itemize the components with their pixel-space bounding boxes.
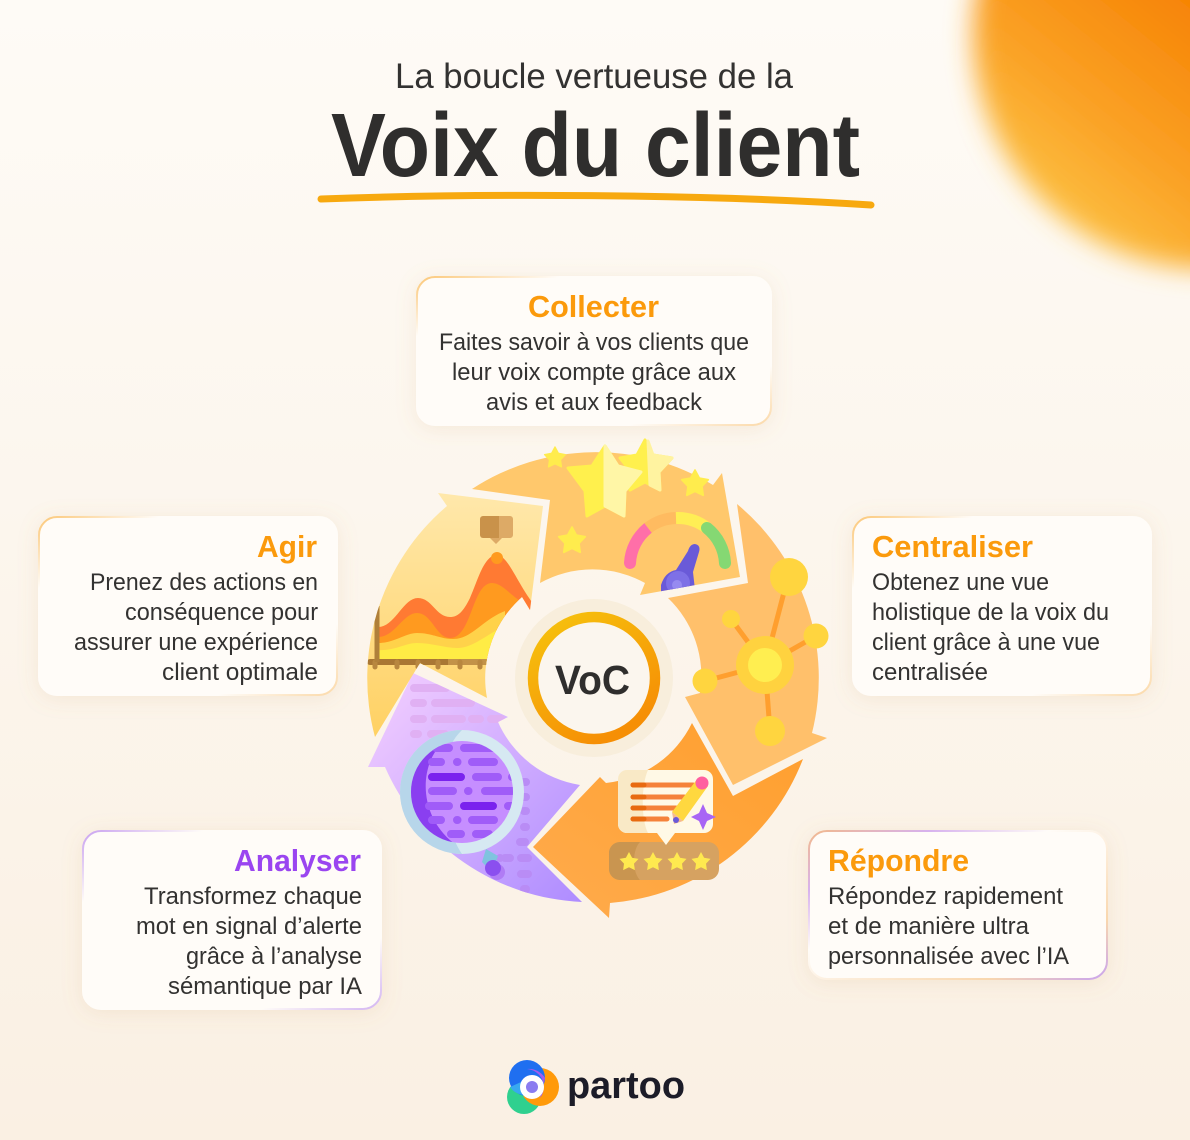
title underline [321,195,871,205]
title line 1: La boucle vertueuse de la [395,57,794,96]
text: Répondre body: Répondez rapidement [828,883,1063,910]
wordmark: partoo [567,1065,685,1107]
text: Agir body [74,569,318,686]
cycle wheel [367,440,828,918]
text: Collecter body [439,329,749,416]
text: Analyser body: mot en signal d’alerte [136,913,362,940]
icon: magnifier [400,730,524,880]
heading: Collecter: Collecter [528,289,659,324]
icon: area chart [370,516,535,667]
text: Répondre body: et de manière ultra [828,913,1030,940]
text: Répondre body [828,883,1069,970]
panel: Collecter [417,277,771,425]
icon: satisfaction gauge [630,518,725,596]
panel: Agir [39,517,337,695]
heading: Centraliser: Centraliser [872,529,1033,564]
icon: stars [545,440,708,552]
text: Agir body: Prenez des actions en [90,569,318,596]
icon: review bubble [609,770,719,880]
text: Analyser body: grâce à l’analyse [186,943,362,970]
text: Analyser body: Transformez chaque [144,883,362,910]
text: Centraliser body [872,569,1109,686]
text: Centraliser body: Obtenez une vue [872,569,1049,596]
text: Centraliser body: client grâce à une vue [872,629,1100,656]
segment: centralise arrow [668,504,827,785]
heading: Agir: Agir [257,529,317,564]
icon: network hub [692,558,828,746]
icon: text analysis under magnifier [414,688,528,889]
text: Collecter body: leur voix compte grâce aux [452,359,736,386]
text: Collecter body: Faites savoir à vos clients que [439,329,749,356]
logo: partoo [507,1060,685,1114]
panel: Analyser [83,831,381,1009]
decorative sun [973,0,1190,269]
text: Centraliser body: holistique de la voix du [872,599,1109,626]
text: Agir body: conséquence pour [125,599,318,626]
centre badge: VoC: VoC [555,657,630,703]
text: Centraliser body: centralisée [872,659,988,686]
panel: Répondre [809,831,1107,979]
text: Collecter body: avis et aux feedback [486,389,703,416]
text: Agir body: assurer une expérience [74,629,318,656]
title line 2: Voix du client [331,96,860,196]
segment: act arrow [367,493,543,737]
title [321,57,871,205]
panel: Centraliser [853,517,1151,695]
heading: Analyser: Analyser [234,843,361,878]
segment: analyse arrow [368,673,582,902]
text: Analyser body: sémantique par IA [168,973,362,1000]
text: Répondre body: personnalisée avec l’IA [828,943,1069,970]
text: Analyser body [136,883,362,1000]
segment: respond arrow [533,723,803,918]
heading: Répondre: Répondre [828,843,969,878]
centre badge: VoC [515,599,673,757]
icon: logo mark [507,1060,559,1114]
text: Agir body: client optimale [162,659,318,686]
segment: collect arrow [472,452,740,595]
